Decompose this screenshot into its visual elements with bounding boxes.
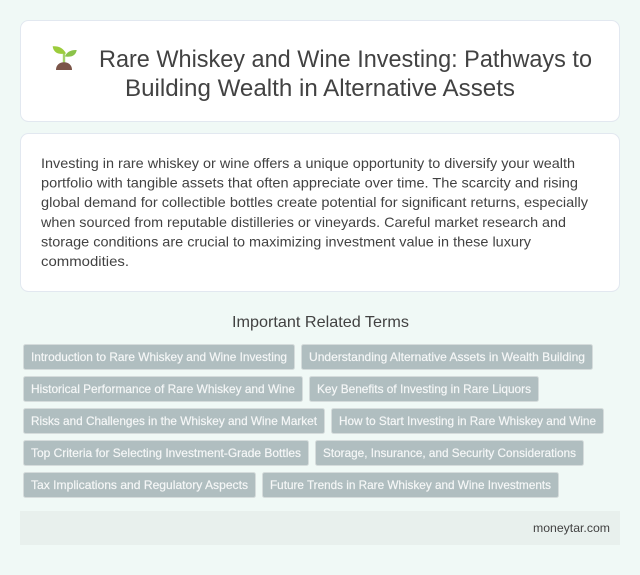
tag bbox=[24, 472, 256, 498]
tag: Future Trends in Rare Whiskey and Wine Investments bbox=[270, 478, 551, 492]
tag bbox=[24, 440, 308, 466]
text block: introduction: commodities. bbox=[41, 253, 129, 269]
panel: title card bbox=[20, 20, 620, 122]
text block: introduction bbox=[40, 155, 588, 269]
tag bbox=[24, 408, 324, 434]
tag: Risks and Challenges in the Whiskey and Wine Market bbox=[31, 414, 318, 428]
tag: How to Start Investing in Rare Whiskey and Wine bbox=[339, 414, 596, 428]
tag bbox=[24, 376, 302, 402]
title bbox=[99, 46, 592, 102]
title: Building Wealth in Alternative Assets bbox=[125, 75, 515, 102]
tag bbox=[310, 376, 538, 402]
tag list bbox=[24, 344, 604, 498]
text block: introduction: portfolio with tangible assets that often appreciate over time. The scarcity and rising bbox=[41, 175, 578, 191]
tag: Top Criteria for Selecting Investment-Grade Bottles bbox=[31, 446, 301, 460]
tag: Historical Performance of Rare Whiskey and Wine bbox=[31, 382, 295, 396]
tag bbox=[302, 344, 592, 370]
icon: seedling bbox=[53, 46, 77, 70]
tag: Key Benefits of Investing in Rare Liquors bbox=[317, 382, 531, 396]
text block: introduction: when sourced from reputable distilleries or vineyards. Careful market research and bbox=[40, 214, 566, 230]
tag bbox=[332, 408, 604, 434]
text block: introduction: Investing in rare whiskey or wine offers a unique opportunity to diversify your wealth bbox=[41, 155, 575, 171]
tag bbox=[316, 440, 584, 466]
footer: moneytar.com bbox=[533, 521, 610, 535]
text block: introduction: storage conditions are crucial to maximizing investment value in these luxury bbox=[41, 233, 531, 249]
tag: Introduction to Rare Whiskey and Wine Investing bbox=[31, 350, 287, 364]
footer bbox=[20, 511, 620, 545]
text block: introduction: global demand for collectible bottles create potential for significant returns, especially bbox=[41, 194, 588, 210]
title: Rare Whiskey and Wine Investing: Pathways to bbox=[99, 46, 592, 73]
tag: Storage, Insurance, and Security Considerations bbox=[323, 446, 576, 460]
panel: introduction text bbox=[20, 134, 620, 292]
tag bbox=[262, 472, 558, 498]
tag bbox=[24, 344, 294, 370]
tag: Tax Implications and Regulatory Aspects bbox=[31, 478, 248, 492]
heading: important related terms: Important Related Terms bbox=[232, 314, 409, 331]
tag: Understanding Alternative Assets in Wealth Building bbox=[309, 350, 585, 364]
